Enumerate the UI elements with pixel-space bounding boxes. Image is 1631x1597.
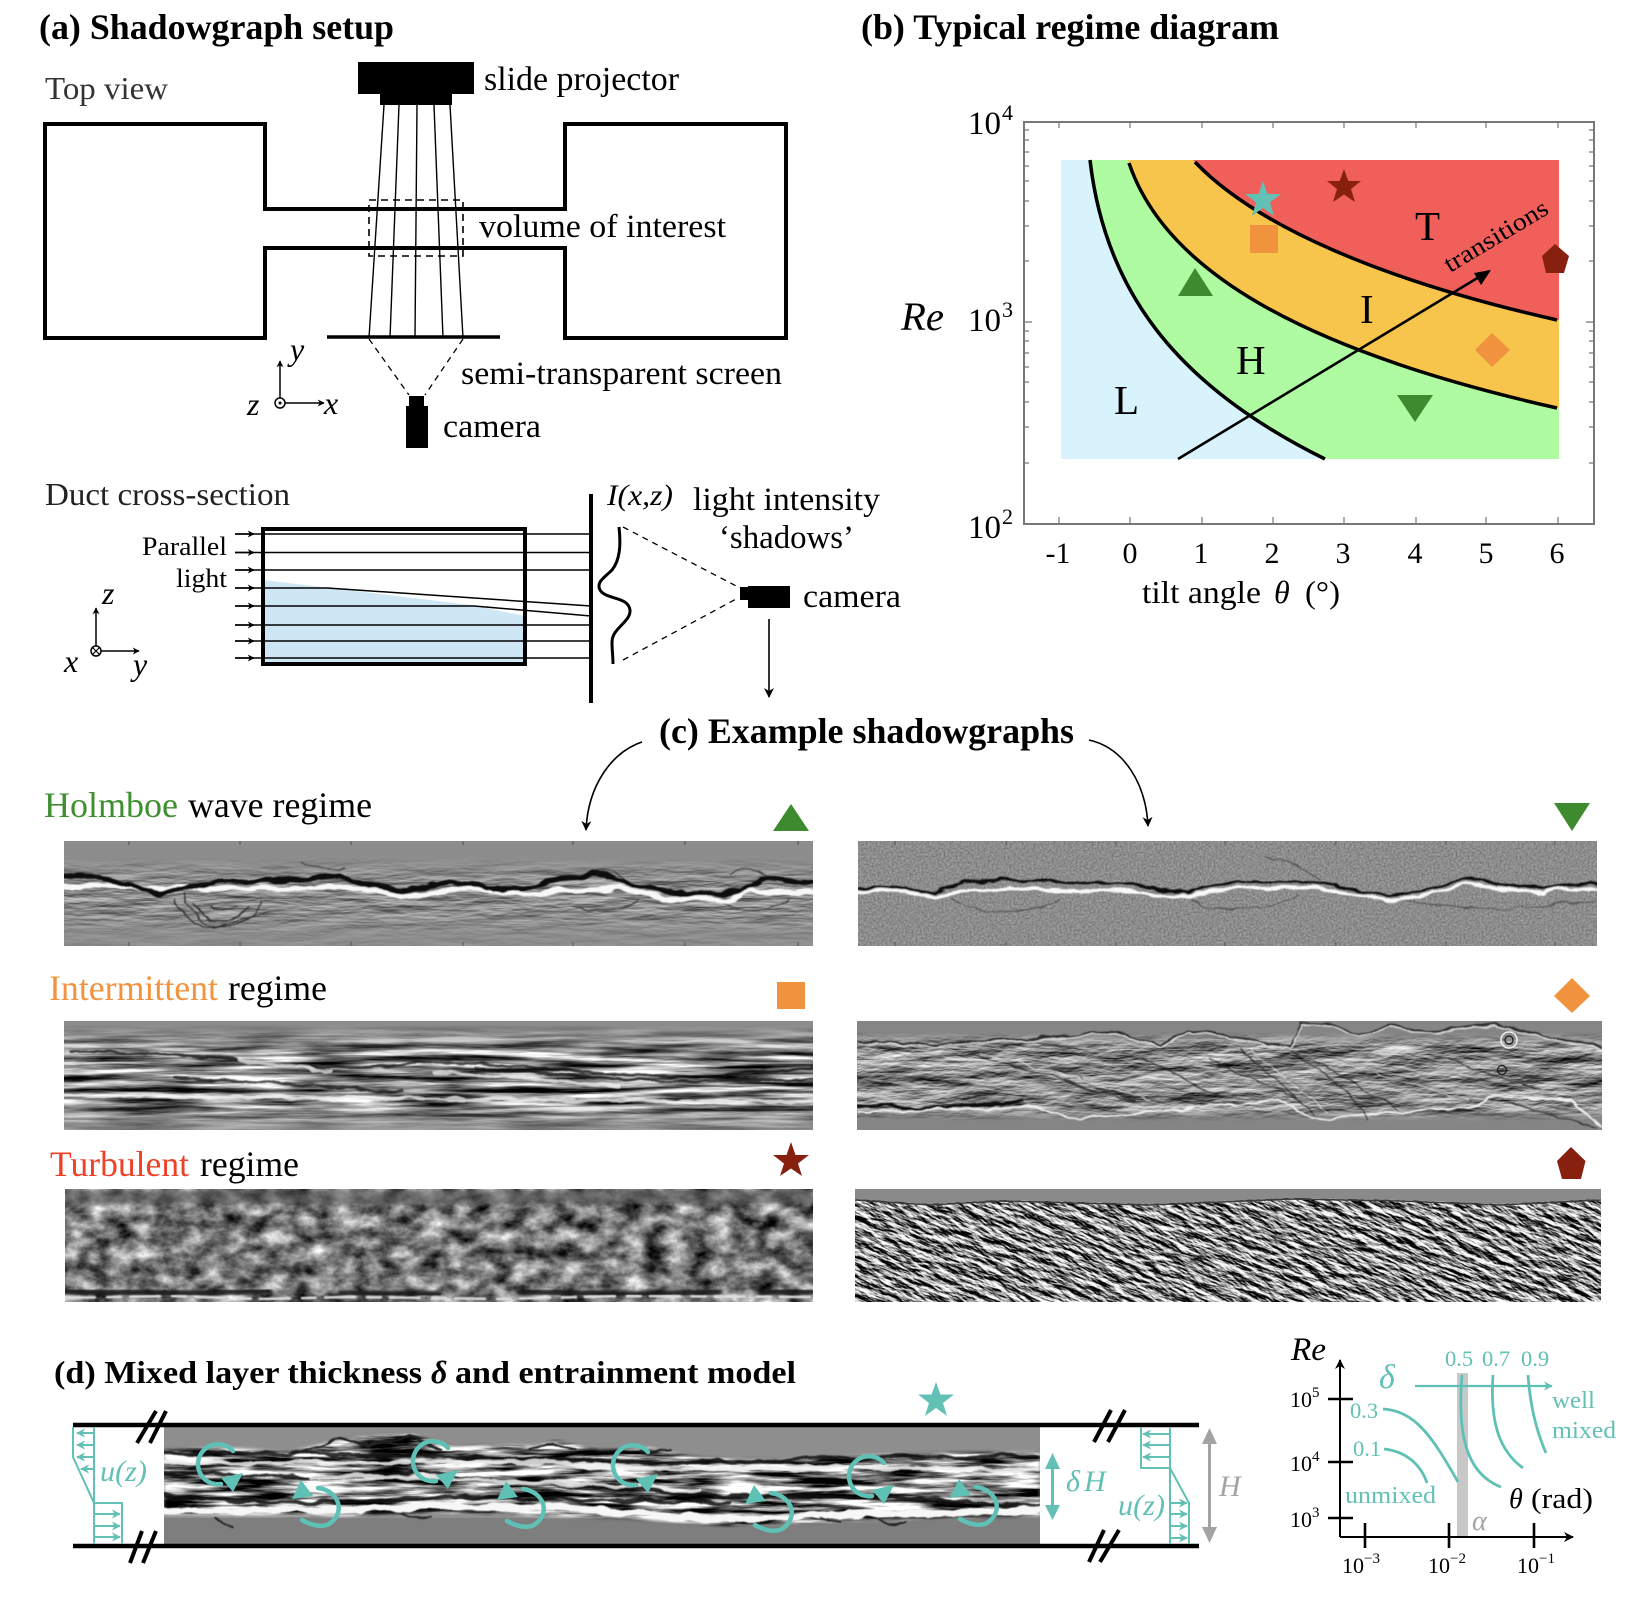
icon: diamond [1554, 978, 1590, 1013]
heading: (d) Mixed layer thickness δ and entrainment model: and entrainment model [455, 1354, 796, 1390]
x tick labels: −1 [1539, 1551, 1555, 1567]
label: transitions: transitions [1439, 195, 1553, 278]
duct cross-section box [263, 529, 525, 664]
heading: (d) Mixed layer thickness δ and entrainment model: (d) Mixed layer thickness [54, 1354, 422, 1390]
contour value labels: 0.5 [1445, 1346, 1473, 1371]
curved arrow left [586, 742, 642, 830]
x tick labels: 2 [1264, 537, 1280, 570]
panel: (b) regime diagram [861, 7, 1594, 610]
y tick labels: 10 [1290, 1387, 1312, 1412]
arrow: H [1202, 1428, 1217, 1543]
x axis label: tilt angle [1142, 574, 1261, 610]
shadowgraph: Holmboe right [858, 841, 1597, 946]
chart: entrainment model sketch [1290, 1332, 1616, 1578]
label: Turbulent regime: regime [200, 1144, 299, 1184]
heading: (b) Typical regime diagram: (b) Typical regime diagram [861, 7, 1279, 47]
label: Holmboe wave regime [44, 785, 372, 825]
semi-transparent screen [327, 335, 500, 339]
vortices [1498, 1032, 1517, 1074]
label: H: H [1218, 1470, 1243, 1503]
label: I(x,z): I(x,z) [606, 479, 673, 512]
x tick labels: 10 [1342, 1553, 1364, 1578]
x tick labels: 4 [1408, 537, 1422, 570]
curved arrow right [1089, 740, 1148, 826]
contour value labels: 0.9 [1521, 1346, 1549, 1371]
x axis label: θ [1274, 574, 1290, 610]
contour value labels: 0.3 [1350, 1398, 1378, 1423]
regime letters: T [1415, 203, 1440, 249]
delta contours [1383, 1375, 1546, 1487]
icon: triangle down [1554, 803, 1590, 831]
icon: dark star [1327, 169, 1361, 202]
label: u(z) right: u(z) [1118, 1489, 1165, 1522]
axes top view: z [246, 386, 260, 422]
shadowgraph: Turbulent right [855, 1189, 1601, 1302]
heading: (d) Mixed layer thickness δ and entrainment model: δ [431, 1354, 447, 1390]
icon: teal star [1245, 181, 1281, 216]
contour value labels: 0.1 [1353, 1436, 1381, 1461]
x tick labels: 6 [1550, 537, 1564, 570]
x tick labels: −3 [1364, 1551, 1380, 1567]
y tick labels: 10 [1290, 1451, 1312, 1476]
label: u(z) left: u(z) [100, 1455, 147, 1488]
label: slide projector: slide projector [484, 61, 679, 98]
shadowgraph: mixing layer [164, 1427, 1040, 1544]
axes cross-section: y [130, 646, 148, 682]
parallel light rays [235, 534, 591, 658]
regime letters: I [1360, 286, 1374, 332]
heading: (a) Shadowgraph setup: (a) Shadowgraph setup [39, 7, 394, 47]
label: Duct cross-section: Duct cross-section [45, 476, 290, 512]
x tick labels: 0 [1122, 537, 1138, 570]
tank outline top view [45, 124, 786, 338]
arrow: delta H [1045, 1453, 1060, 1520]
label: semi-transparent screen: semi-transparent screen [461, 356, 782, 392]
x axis label [1142, 574, 1340, 610]
contour value labels: 0.7 [1482, 1346, 1510, 1371]
axes top view: y [287, 331, 305, 367]
y tick labels: 4 [1002, 100, 1013, 125]
light intensity curve [599, 527, 630, 664]
heading: (c) Example shadowgraphs: (c) Example shadowgraphs [659, 711, 1074, 751]
contour value labels [1350, 1346, 1549, 1461]
x tick labels: 10 [1517, 1553, 1539, 1578]
axes cross-section [63, 575, 148, 682]
y tick labels: 4 [1312, 1449, 1320, 1465]
label: Parallel light [142, 532, 228, 593]
label: Intermittent regime: Intermittent [49, 968, 218, 1008]
icon: dark pentagon [1542, 244, 1569, 273]
label: camera: camera [803, 579, 901, 615]
regime letters [1114, 203, 1440, 423]
shadowgraph: Intermittent left [64, 1021, 813, 1130]
y tick labels [1290, 1385, 1320, 1532]
shadowgraph: Turbulent left [65, 1189, 813, 1302]
icon: green triangle down [1397, 395, 1433, 422]
y tick labels: 3 [1312, 1505, 1320, 1521]
regime letters: L [1114, 377, 1139, 423]
icon: teal star [918, 1382, 954, 1416]
icon: slide projector [358, 62, 474, 105]
duct walls [73, 1425, 1199, 1546]
arrowhead [1474, 270, 1491, 285]
label: well mixed [1552, 1388, 1616, 1444]
axes cross-section: x [63, 643, 78, 679]
label: theta (rad) [1509, 1484, 1593, 1515]
x tick labels: −2 [1450, 1551, 1466, 1567]
y tick labels: 2 [1002, 504, 1013, 529]
icon: pentagon [1557, 1147, 1586, 1179]
shadowgraph: Intermittent right [857, 1021, 1602, 1130]
label: Intermittent regime [49, 968, 327, 1008]
gray band alpha [1457, 1373, 1468, 1537]
axes top view [246, 331, 338, 422]
label: theta (rad): θ [1509, 1484, 1523, 1515]
velocity profile left [73, 1427, 122, 1544]
label: Re: Re [1290, 1332, 1326, 1368]
icon: camera [406, 396, 428, 448]
label: unmixed: unmixed [1345, 1483, 1436, 1509]
y tick labels: 10 [968, 303, 1001, 339]
label: Turbulent regime: Turbulent [50, 1144, 189, 1184]
icon: square [777, 982, 805, 1009]
axes top view: x [323, 385, 338, 421]
label: delta: δ [1379, 1359, 1396, 1396]
icon: camera side [740, 586, 790, 608]
volume of interest dashed box [369, 200, 463, 256]
x tick labels: 3 [1336, 537, 1350, 570]
label: delta H [1066, 1465, 1108, 1498]
label: theta (rad): (rad) [1531, 1484, 1593, 1515]
regime letters: H [1236, 337, 1266, 383]
icon: star [773, 1142, 809, 1176]
heading: (d) Mixed layer thickness δ and entrainment model [54, 1354, 796, 1390]
label: Intermittent regime: regime [228, 968, 327, 1008]
y tick labels [968, 100, 1013, 546]
dense layer fill [263, 580, 525, 665]
label: Holmboe wave regime: Holmboe [44, 785, 178, 825]
label: delta H: δ [1066, 1465, 1081, 1498]
camera view lines [623, 527, 740, 660]
transitions arrow [1178, 271, 1489, 459]
y axis label Re: Re [900, 294, 944, 339]
icon: orange square [1250, 225, 1278, 253]
label: delta H: H [1083, 1465, 1108, 1498]
axes cross-section: z [101, 575, 115, 611]
x tick labels: 10 [1428, 1553, 1450, 1578]
regime boundary curves [1090, 160, 1557, 459]
axes [1328, 1360, 1573, 1548]
panel: (d) mixed layer thickness and entrainment [54, 1332, 1616, 1578]
y tick labels: 5 [1312, 1385, 1320, 1401]
label: Turbulent regime [50, 1144, 299, 1184]
icon: triangle up [773, 804, 809, 831]
x tick labels: -1 [1046, 537, 1070, 570]
light rays [369, 105, 463, 338]
arrow down to shadowgraphs [768, 619, 770, 697]
x tick labels: 5 [1478, 537, 1494, 570]
x tick labels [1046, 537, 1564, 570]
label: light intensity shadows: ‘shadows’ [719, 520, 854, 556]
y tick labels: 10 [1290, 1507, 1312, 1532]
y tick labels: 10 [968, 510, 1001, 546]
y tick labels: 10 [968, 106, 1001, 142]
x tick labels [1342, 1551, 1555, 1578]
x axis label: (°) [1305, 574, 1340, 610]
icon: orange diamond [1475, 333, 1510, 367]
velocity profile right [1141, 1427, 1189, 1544]
panel: (c) example shadowgraphs [45, 718, 1602, 1302]
label: volume of interest: volume of interest [479, 209, 726, 245]
label: Parallel light: light [176, 564, 228, 593]
label: well mixed: mixed [1552, 1418, 1616, 1444]
x tick labels: 1 [1194, 537, 1208, 570]
regime map areas [1061, 160, 1559, 459]
shadowgraph: Holmboe left [64, 841, 813, 946]
label: light intensity shadows [693, 482, 881, 556]
camera field of view [369, 339, 463, 395]
panel: (a) shadowgraph setup [39, 7, 901, 703]
label: alpha: α [1472, 1506, 1488, 1537]
label: Parallel light: Parallel [142, 532, 227, 561]
label: light intensity shadows: light intensity [693, 482, 881, 518]
label: camera: camera [443, 409, 541, 445]
label: well mixed: well [1552, 1388, 1595, 1414]
label: Holmboe wave regime: wave regime [188, 785, 372, 825]
label: Top view: Top view [45, 70, 168, 106]
y tick labels: 3 [1002, 297, 1013, 322]
eddies [198, 1441, 997, 1531]
plot frame with ticks [1024, 122, 1594, 524]
break marks [130, 1410, 1125, 1563]
image plane bar [589, 494, 593, 703]
icon: green triangle up [1178, 268, 1213, 296]
delta direction arrow [1415, 1385, 1552, 1387]
